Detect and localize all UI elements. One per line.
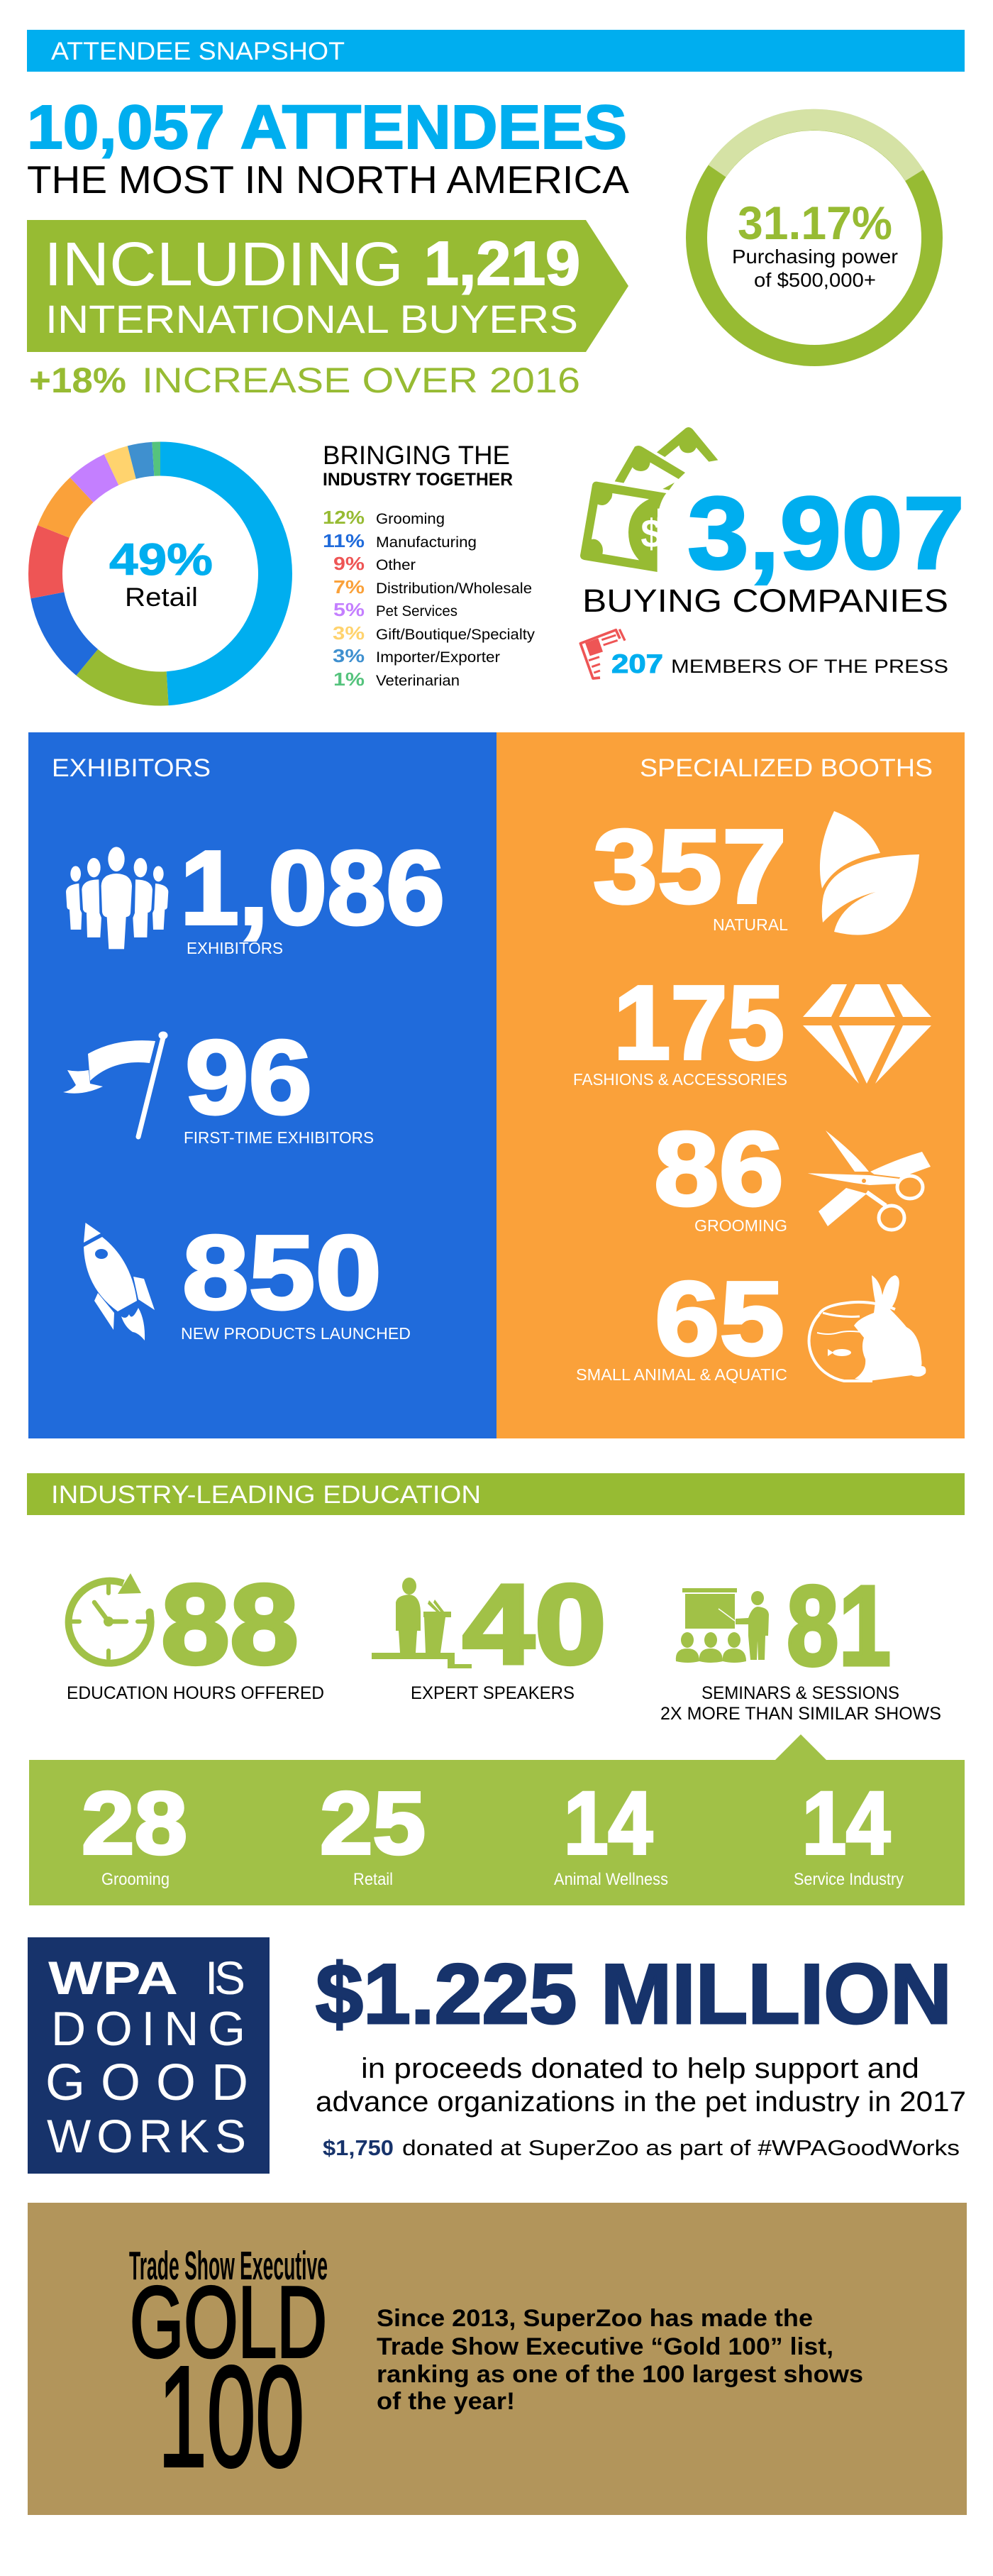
logo: trade show executive gold 100 [129, 2243, 328, 2497]
icon: speaker at podium [372, 1578, 472, 1668]
icon: money bills [580, 427, 718, 575]
icon: money bills: $ [640, 512, 662, 557]
arrow banner: international buyers: 1,219 [424, 229, 580, 298]
stat: 65 small animal and aquatic [576, 1260, 787, 1384]
stat: 96 first-time exhibitors [184, 1019, 374, 1147]
stat: 88 hours [67, 1561, 324, 1703]
legend: bringing the industry together: Pet Services [376, 603, 457, 620]
stat: 88 hours: EDUCATION HOURS OFFERED [67, 1683, 324, 1703]
ring chart: purchasing power: 31.17% [738, 197, 892, 249]
icon: rabbit and fish bowl [809, 1275, 926, 1381]
icon: diamond [803, 984, 931, 1084]
icon: clock [69, 1573, 151, 1663]
panel: session breakdown: 14 [802, 1774, 890, 1873]
stat: 357 natural: NATURAL [713, 915, 788, 934]
panel: session breakdown: 14 [564, 1774, 653, 1873]
legend: bringing the industry together: Importer/Exporter [376, 649, 500, 666]
legend: bringing the industry together: 3% [333, 622, 365, 644]
panel: wpa is doing good works [28, 1937, 270, 2174]
ring chart: purchasing power: Purchasing power [732, 246, 898, 268]
icon: scissors and comb [801, 1130, 931, 1230]
panel: session breakdown: 25 [320, 1774, 426, 1873]
donation text block [316, 1947, 966, 2160]
icon: newspaper [580, 629, 625, 678]
stat: 81 seminars: 81 [787, 1562, 891, 1689]
increase over 2016: INCREASE OVER 2016 [142, 360, 580, 400]
icon: leaf [820, 811, 919, 935]
stat: 96 first-time exhibitors: FIRST-TIME EXHIBITORS [184, 1128, 374, 1147]
donut chart: industry mix: Retail [125, 583, 198, 612]
legend: bringing the industry together: Other [376, 557, 416, 573]
stat: 96 first-time exhibitors: 96 [185, 1019, 312, 1136]
arrow banner: international buyers [27, 220, 628, 352]
header bar: attendee snapshot: ATTENDEE SNAPSHOT [51, 38, 345, 65]
legend: bringing the industry together: 11% [323, 530, 365, 551]
stat: 850 new products [181, 1214, 411, 1343]
donation text block: donated at SuperZoo as part of #WPAGoodWorks [402, 2135, 960, 2160]
icon: people [66, 847, 168, 949]
panel: gold 100 [28, 2203, 967, 2515]
stat: 40 speakers [411, 1561, 606, 1703]
icon: flag [63, 1032, 167, 1137]
stat: 357 natural: 357 [593, 808, 787, 925]
stat: 1,086 exhibitors: 1,086 [180, 830, 445, 947]
donation text block: $1,750 [323, 2135, 394, 2160]
donut chart: industry mix [45, 458, 275, 688]
panel: wpa is doing good works: IS [205, 1952, 245, 2004]
stat: 175 fashions: 175 [614, 964, 784, 1081]
icon: rocket [84, 1223, 155, 1341]
donation text block: in proceeds donated to help support and [361, 2053, 919, 2084]
stat: buying companies: 3,907 [687, 475, 965, 590]
panel: session breakdown: Service Industry [794, 1870, 904, 1889]
panel: session breakdown: 28 [82, 1774, 187, 1873]
heading: specialized booths: SPECIALIZED BOOTHS [640, 754, 933, 782]
legend: bringing the industry together [323, 441, 536, 690]
icon: seminar presenter [676, 1588, 769, 1663]
panel: session breakdown: Grooming [101, 1870, 170, 1889]
legend: bringing the industry together: Distribution/Wholesale [376, 580, 532, 597]
panel: exhibitors [28, 732, 496, 1438]
panel: wpa is doing good works: WORKS [47, 2110, 246, 2162]
legend: bringing the industry together: 3% [333, 645, 365, 666]
panel: wpa is doing good works: DOING [51, 2002, 245, 2056]
legend: bringing the industry together: 7% [333, 576, 365, 598]
panel: gold 100: Trade Show Executive [129, 2243, 328, 2289]
stat: 86 grooming: GROOMING [694, 1216, 787, 1235]
section: attendee snapshot [27, 30, 965, 400]
panel: session breakdown: Retail [353, 1870, 393, 1889]
section: industry-leading education [27, 1473, 965, 1905]
stat: 86 grooming: 86 [654, 1111, 784, 1228]
heading: exhibitors: EXHIBITORS [52, 754, 211, 782]
text: gold 100 description: of the year! [377, 2388, 515, 2415]
arrow banner: international buyers: INCLUDING [44, 230, 404, 299]
increase over 2016 [29, 360, 580, 400]
donation text block: $1.225 MILLION [316, 1947, 952, 2042]
stat: 40 speakers: 40 [462, 1561, 606, 1688]
legend: bringing the industry together: Veterinarian [376, 673, 460, 689]
panel: session breakdown: Animal Wellness [554, 1870, 668, 1889]
text: gold 100 description: Since 2013, SuperZoo has made the [377, 2305, 813, 2332]
stat: 175 fashions: FASHIONS & ACCESSORIES [573, 1070, 787, 1089]
legend: bringing the industry together: Manufacturing [376, 534, 477, 551]
stat: 88 hours: 88 [161, 1561, 299, 1688]
stat: 65 small animal and aquatic: 65 [655, 1260, 784, 1377]
text: gold 100 description: Trade Show Executive “Gold 100” list, [377, 2333, 833, 2360]
stat: members of the press: 207 [611, 649, 663, 678]
legend: bringing the industry together: BRINGING THE [323, 441, 510, 470]
legend: bringing the industry together: 12% [323, 507, 365, 528]
increase over 2016: +18% [29, 360, 126, 400]
legend: bringing the industry together: 5% [333, 599, 365, 620]
panel: wpa is doing good works: GOOD [45, 2054, 248, 2111]
legend: bringing the industry together: 9% [333, 553, 365, 574]
legend: bringing the industry together: Grooming [376, 511, 445, 527]
panel: specialized booths [496, 732, 965, 1438]
stat: buying companies: BUYING COMPANIES [582, 583, 948, 619]
panel: wpa is doing good works: WPA [48, 1952, 178, 2004]
stat: 850 new products: 850 [182, 1214, 382, 1331]
legend: bringing the industry together: INDUSTRY TOGETHER [323, 470, 513, 490]
panel: session breakdown [29, 1734, 965, 1905]
ring chart: purchasing power [697, 120, 932, 356]
stat: 1,086 exhibitors: EXHIBITORS [187, 939, 283, 957]
logo: trade show executive gold 100: 100 [158, 2336, 304, 2497]
donut chart: industry mix: 49% [109, 535, 213, 585]
legend: bringing the industry together: 1% [333, 668, 365, 690]
header bar: education [27, 1473, 965, 1515]
arrow banner: international buyers: INTERNATIONAL BUYERS [45, 297, 578, 341]
stat: members of the press [611, 649, 948, 678]
logo: trade show executive gold 100: GOLD [130, 2266, 327, 2379]
donation text block: advance organizations in the pet industry in 2017 [316, 2086, 966, 2118]
subhead: most in north america: THE MOST IN NORTH AMERICA [27, 158, 629, 202]
stat: 850 new products: NEW PRODUCTS LAUNCHED [181, 1324, 411, 1343]
stat: 81 seminars: SEMINARS & SESSIONS [701, 1683, 899, 1703]
legend: bringing the industry together: Gift/Boutique/Specialty [376, 627, 536, 643]
stat: members of the press: MEMBERS OF THE PRESS [671, 656, 948, 677]
stat: 81 seminars: 2X MORE THAN SIMILAR SHOWS [660, 1704, 941, 1724]
stat: buying companies [582, 475, 965, 619]
stat: 81 seminars [660, 1562, 941, 1724]
headline: attendees: 10,057 ATTENDEES [27, 93, 627, 162]
header bar: education: INDUSTRY-LEADING EDUCATION [51, 1481, 481, 1509]
ring chart: purchasing power: of $500,000+ [754, 269, 876, 291]
header bar: attendee snapshot [27, 30, 965, 72]
text: gold 100 description [377, 2305, 863, 2415]
stat: 40 speakers: EXPERT SPEAKERS [411, 1683, 575, 1703]
stat: 65 small animal and aquatic: SMALL ANIMAL & AQUATIC [576, 1365, 787, 1384]
text: gold 100 description: ranking as one of the 100 largest shows [377, 2361, 863, 2388]
